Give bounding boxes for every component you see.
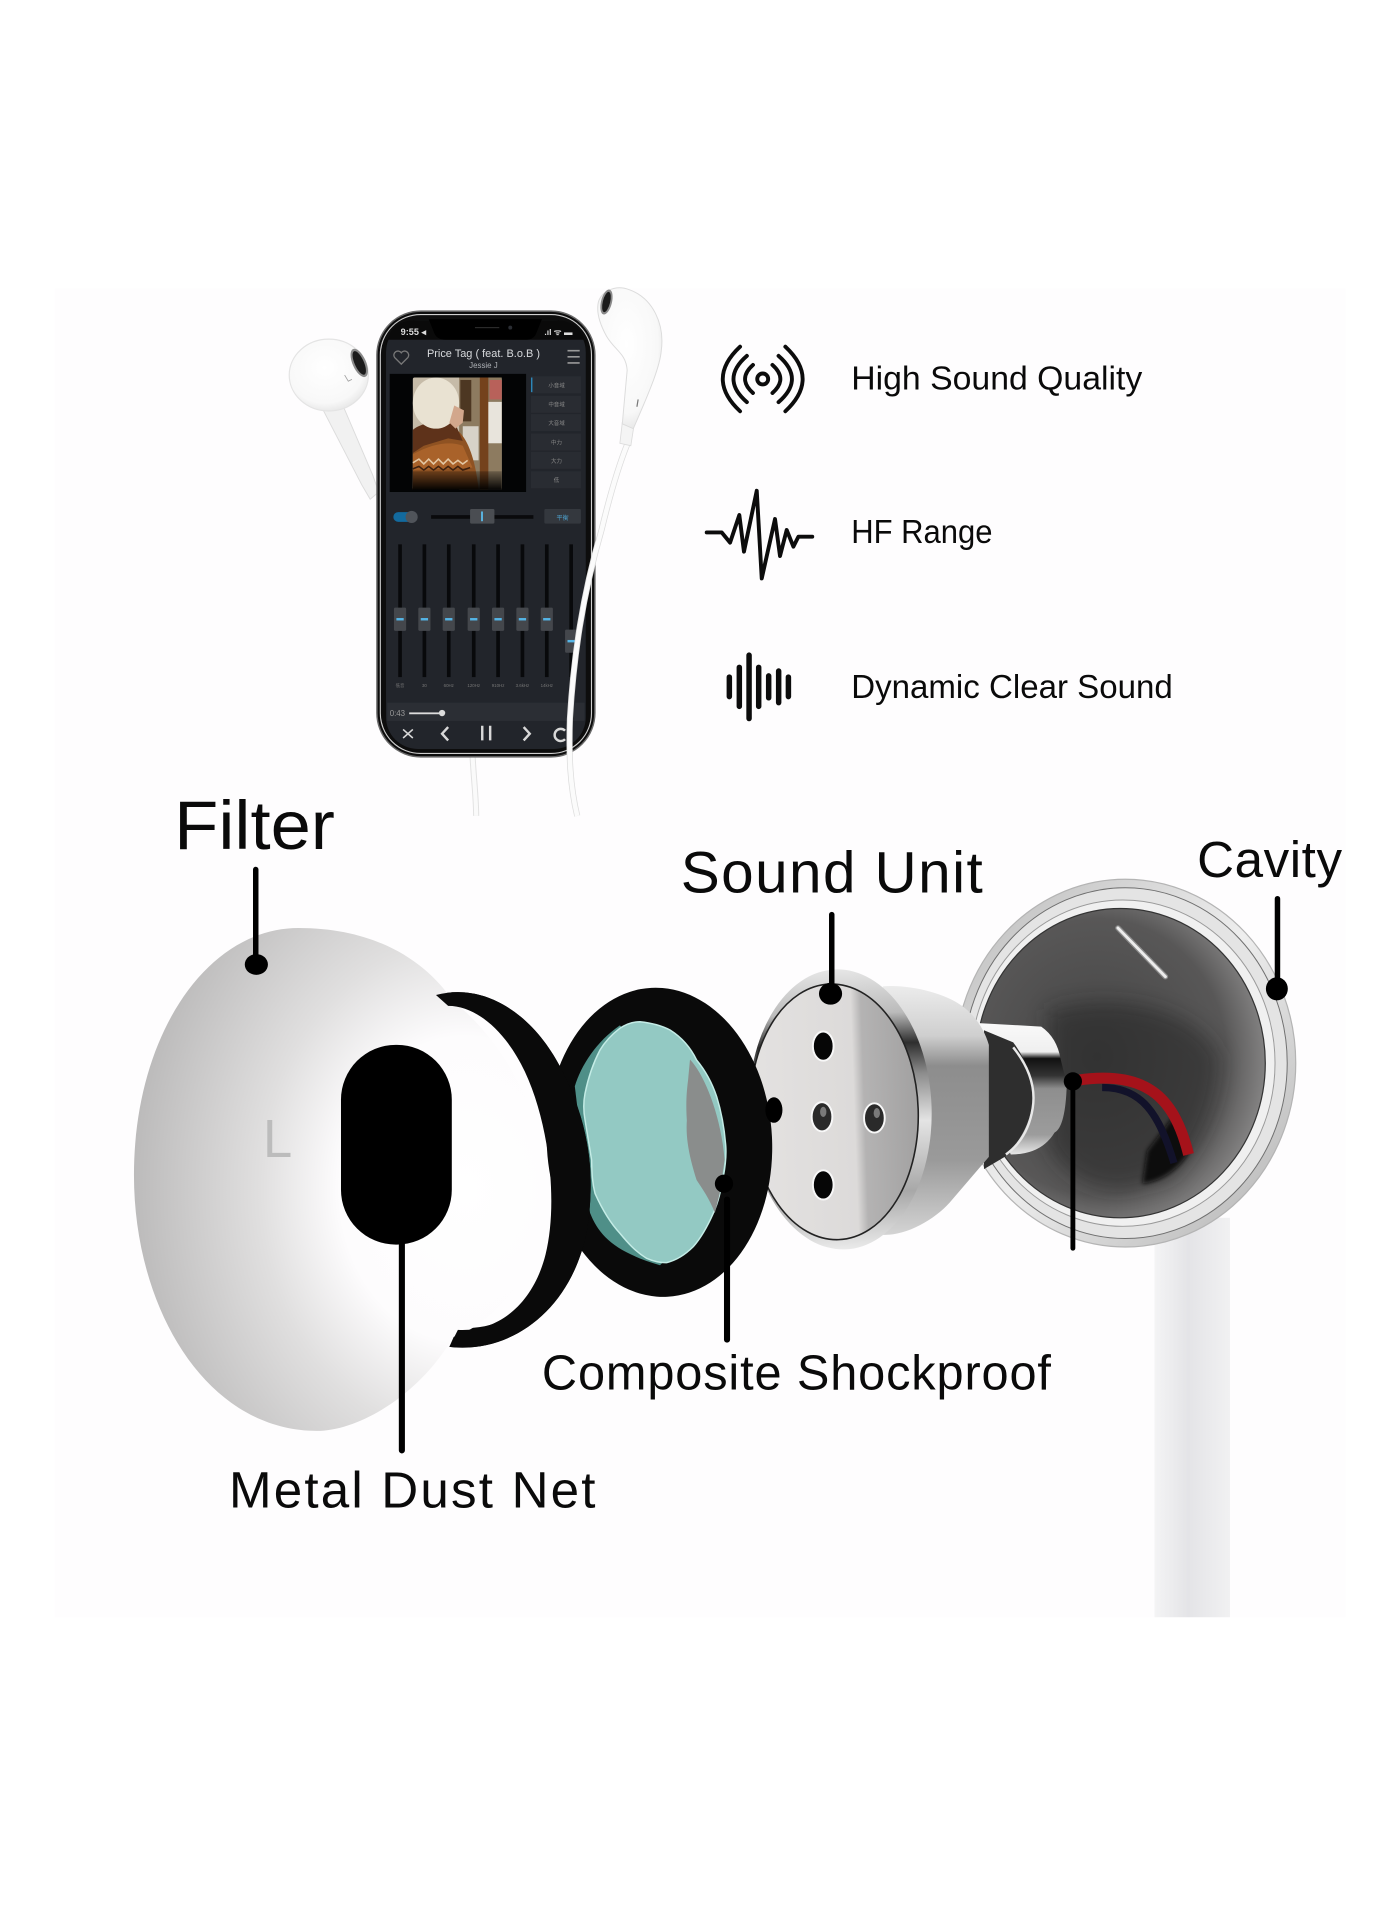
metal dust net pill: [341, 1045, 452, 1245]
hole highlights: [820, 1107, 880, 1118]
chrome rim: [744, 966, 936, 1253]
artist: Jessie J: [469, 361, 498, 370]
status bar time: 9:55 ◂: [401, 327, 426, 337]
preset list: 大力: [551, 457, 562, 465]
equalizer labels: 低音: [396, 682, 405, 689]
cavity: [955, 879, 1296, 1247]
label: HF Range: [851, 513, 993, 550]
preset button: [544, 509, 581, 524]
equalizer sliders: [394, 544, 577, 677]
preset list: [531, 376, 581, 488]
playback progress: 0:43: [390, 709, 406, 718]
callout: Metal Dust Net: Metal Dust Net: [229, 1462, 596, 1519]
cavity rim: [955, 879, 1296, 1247]
phone: [377, 311, 595, 757]
holes: [812, 1031, 885, 1200]
teal lens back: [575, 1025, 682, 1265]
speaker grille: [598, 288, 615, 316]
earphone stem: [1154, 1218, 1230, 1617]
equalizer labels: 910Hz: [492, 683, 504, 688]
dark collar: [984, 1030, 1033, 1169]
teal lens: [584, 1022, 726, 1263]
phone screen: [386, 320, 586, 749]
favourite heart icon: [394, 351, 409, 364]
collar highlight: [1006, 1047, 1034, 1154]
callout: Composite Shockproof: Composite Shockproof: [542, 1347, 1051, 1401]
label: Dynamic Clear Sound: [851, 668, 1173, 705]
sound unit: [744, 966, 1067, 1253]
cable: [570, 444, 627, 816]
wire: [1078, 1078, 1190, 1184]
interior shadow: [1047, 1002, 1220, 1189]
composite shockproof ring: [539, 982, 780, 1303]
feature: dynamic clear sound: [729, 655, 1173, 719]
feature: high sound quality: [723, 347, 1143, 411]
cavity interior: [975, 908, 1265, 1218]
equalizer labels: 14kHz: [541, 683, 553, 688]
status band: [386, 320, 586, 352]
preset list: 大音域: [548, 419, 565, 427]
icon: waveform: [707, 491, 812, 578]
notch with speaker and camera: [429, 319, 542, 340]
equalizer labels: 30: [422, 683, 427, 688]
album art backdrop: [390, 374, 526, 492]
playback controls: [403, 726, 565, 741]
preset list: 低: [554, 476, 560, 484]
left cable below phone: [473, 755, 476, 816]
callout: Cavity: [1197, 831, 1342, 1000]
equalizer labels: 60Hz: [444, 683, 454, 688]
panel: off-white background: [55, 289, 1346, 1617]
filter disc: [134, 928, 591, 1431]
mic slot: [637, 399, 638, 407]
right earbud and cable: [570, 288, 662, 816]
back ring crescent: [436, 992, 591, 1348]
callout: Sound Unit: Sound Unit: [681, 841, 983, 906]
menu icon: [567, 351, 580, 363]
collar: [620, 423, 634, 446]
callout: wire pointer: [1064, 1072, 1082, 1248]
crescent front edge: [436, 992, 591, 1348]
icon: sound waves: [723, 347, 803, 411]
phone highlight line: [380, 315, 591, 753]
vent slit: [1118, 928, 1165, 977]
balance slider: [431, 509, 533, 524]
feature: HF range: [707, 491, 993, 578]
neck: [977, 1023, 1067, 1154]
equalizer labels: 3.6kHz: [516, 683, 529, 688]
face: [746, 981, 923, 1243]
equalizer labels: [396, 682, 553, 689]
preset button: 平衡: [557, 514, 569, 522]
preset list: 中力: [551, 438, 562, 446]
callout dot on ring edge: [765, 1097, 782, 1123]
callout: Composite Shockproof: [542, 1175, 1051, 1401]
album art: [413, 378, 502, 490]
power toggle: [393, 511, 418, 523]
callout: Filter: Filter: [174, 788, 335, 864]
lens reflection: [686, 1059, 725, 1213]
callout: Sound Unit: [681, 841, 983, 1005]
preset list: 小音域: [548, 381, 565, 389]
letter L: L: [263, 1109, 292, 1169]
callout: Filter: [174, 788, 335, 975]
bud body and stem: [598, 288, 662, 429]
status bar icons: .ıl ᯤ ▬: [544, 327, 573, 337]
callout: Cavity: Cavity: [1197, 831, 1342, 888]
phone frame: [377, 311, 595, 757]
metal body: [883, 986, 989, 1235]
preset list: 中音域: [548, 401, 565, 409]
icon: audio bars: [729, 655, 788, 719]
label: High Sound Quality: [851, 360, 1143, 397]
playback progress: [387, 703, 585, 721]
left earbud: [289, 339, 379, 499]
equalizer labels: 120Hz: [467, 683, 480, 688]
song title: Price Tag ( feat. B.o.B ): [427, 348, 540, 360]
